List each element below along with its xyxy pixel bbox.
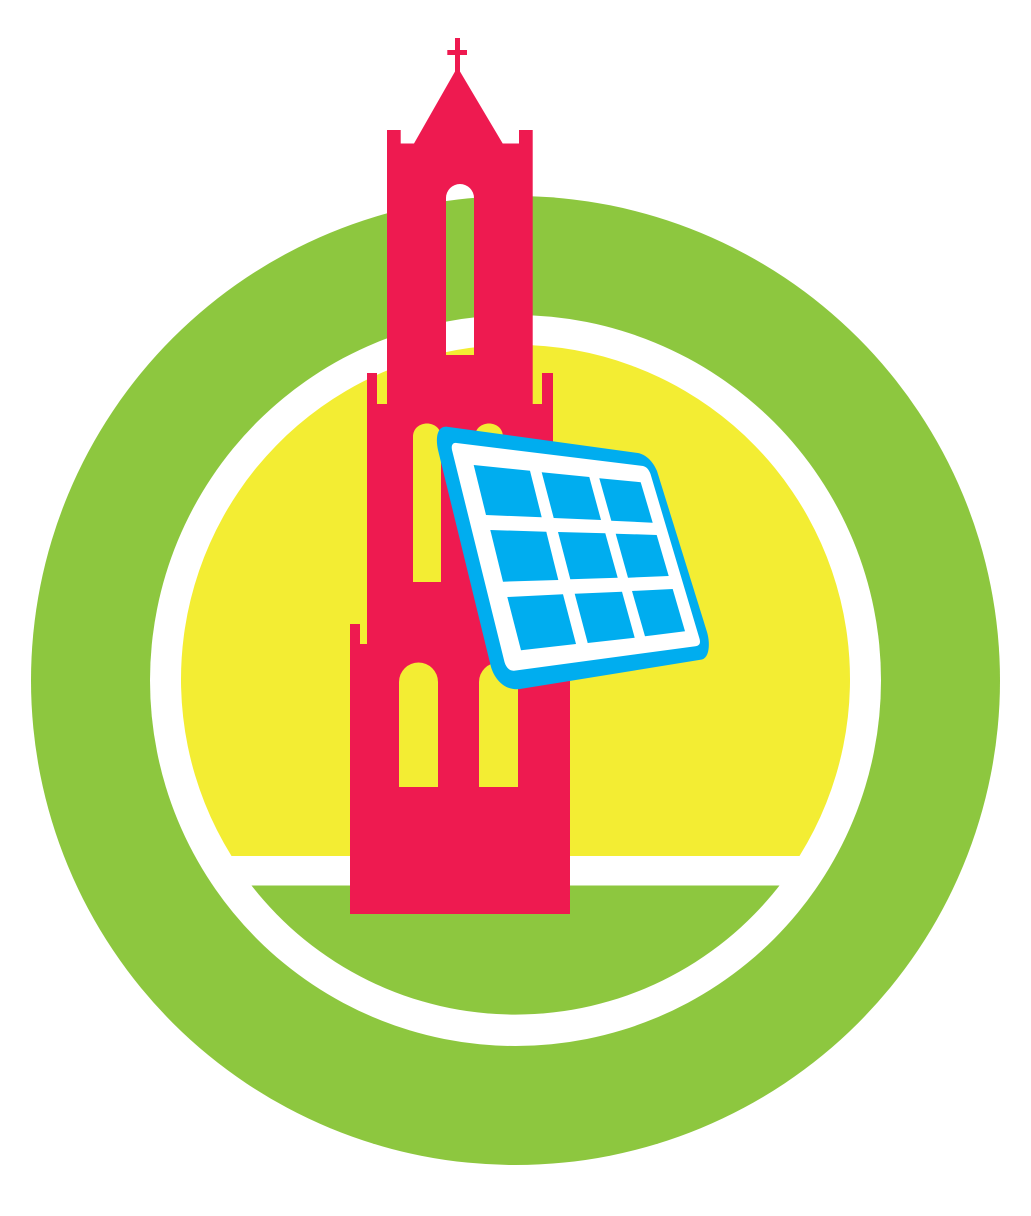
ground bbox=[252, 886, 780, 1015]
outer green ring bbox=[31, 196, 1000, 1165]
panel frame bbox=[437, 427, 709, 689]
tower bbox=[350, 38, 570, 914]
sun disc bbox=[181, 345, 850, 856]
panel face bbox=[452, 443, 700, 671]
icon: solar panel bbox=[437, 427, 709, 689]
white ring bbox=[150, 315, 881, 1046]
panel cells bbox=[474, 465, 685, 650]
